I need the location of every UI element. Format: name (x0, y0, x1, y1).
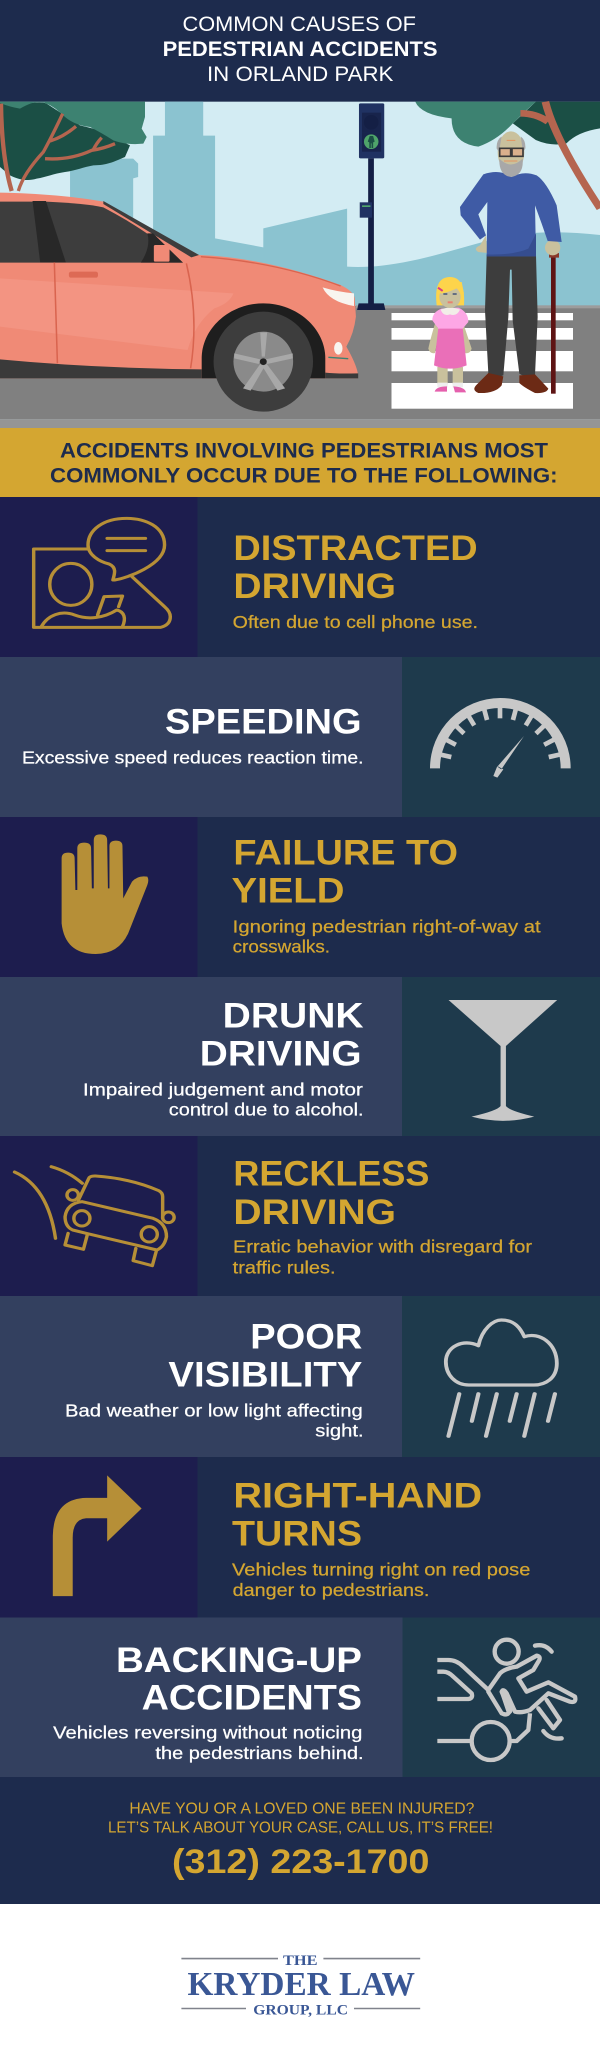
heading (116, 1641, 362, 1718)
heading: BACKING-UP (116, 1641, 362, 1680)
salmon car (0, 193, 358, 412)
heading: POOR (250, 1317, 362, 1356)
description (233, 1237, 532, 1277)
road (0, 305, 600, 428)
city buildings (70, 102, 600, 310)
heading: ACCIDENTS (142, 1679, 362, 1718)
panel: right-hand turns (0, 1457, 600, 1618)
icon: rain cloud (446, 1320, 557, 1436)
gold banner (0, 428, 600, 498)
heading: FAILURE TO (233, 833, 458, 872)
heading: RECKLESS (233, 1155, 429, 1194)
description: Impaired judgement and motor (83, 1079, 363, 1099)
heading (232, 1477, 482, 1554)
banner line 2: COMMONLY OCCUR DUE TO THE FOLLOWING: (50, 464, 558, 488)
traffic light (357, 103, 385, 310)
description (232, 1560, 530, 1600)
old man (460, 131, 562, 394)
icon: martini glass (449, 1000, 557, 1121)
description (53, 1722, 364, 1763)
heading: DRIVING (200, 1035, 362, 1074)
heading (200, 997, 364, 1074)
heading (233, 1155, 429, 1232)
panel: reckless driving (0, 1136, 600, 1296)
header panel (0, 0, 600, 102)
logo: The Kryder Law Group (181, 1953, 420, 2019)
icon: phone chat (34, 518, 170, 627)
heading (168, 1317, 362, 1395)
panel: drunk driving (0, 977, 600, 1136)
description: traffic rules. (233, 1257, 336, 1277)
heading: RIGHT-HAND (233, 1477, 482, 1516)
call to action line 1: HAVE YOU OR A LOVED ONE BEEN INJURED? (129, 1801, 475, 1818)
icon: right turn arrow (53, 1475, 142, 1596)
description: danger to pedestrians. (233, 1580, 429, 1600)
heading: YIELD (232, 872, 344, 911)
crosswalk (392, 313, 573, 409)
description: Often due to cell phone use. (233, 612, 478, 632)
icon: raised hand (62, 834, 148, 954)
panel: distracted driving (0, 497, 600, 657)
phone number: (312) 223-1700 (172, 1843, 429, 1881)
panel: backing-up accidents (0, 1618, 600, 1777)
panel: poor visibility (0, 1296, 600, 1457)
car wheel (214, 312, 313, 412)
heading (233, 529, 478, 606)
title line 1: COMMON CAUSES OF (182, 13, 416, 36)
heading: SPEEDING (165, 702, 362, 741)
heading: DRIVING (233, 1193, 396, 1232)
description: Bad weather or low light affecting (65, 1400, 363, 1420)
right tree (415, 102, 600, 208)
heading: TURNS (232, 1514, 362, 1554)
description: Vehicles reversing without noticing (53, 1722, 362, 1742)
panel: failure to yield (0, 817, 600, 977)
scene backdrop (0, 102, 600, 428)
description: the pedestrians behind. (155, 1743, 364, 1763)
description: Vehicles turning right on red pose (232, 1560, 530, 1580)
description: Excessive speed reduces reaction time. (22, 747, 364, 767)
call to action line 2: LET’S TALK ABOUT YOUR CASE, CALL US, IT’S FREE! (108, 1820, 493, 1837)
icon: swerving car (15, 1167, 174, 1266)
left tree (0, 102, 147, 191)
logo: The Kryder Law Group: GROUP, LLC (253, 2003, 348, 2019)
heading: DRIVING (233, 567, 396, 606)
panel: speeding (0, 657, 600, 817)
girl (428, 277, 472, 392)
title line 3: IN ORLAND PARK (207, 63, 393, 86)
icon: pedestrian struck by car (437, 1640, 575, 1760)
heading: DRUNK (223, 997, 364, 1036)
description: Ignoring pedestrian right-of-way at (233, 916, 541, 936)
footer call to action (0, 1777, 600, 1904)
description (233, 916, 541, 956)
logo: The Kryder Law Group: KRYDER LAW (188, 1966, 415, 2003)
description (65, 1400, 364, 1440)
title line 2: PEDESTRIAN ACCIDENTS (163, 38, 438, 61)
logo: The Kryder Law Group: THE (283, 1953, 318, 1969)
icon: speedometer (430, 698, 571, 778)
description: sight. (315, 1420, 364, 1440)
description (83, 1079, 364, 1119)
heading: DISTRACTED (233, 529, 478, 568)
description: crosswalks. (233, 936, 330, 956)
banner line 1: ACCIDENTS INVOLVING PEDESTRIANS MOST (60, 440, 548, 462)
description: control due to alcohol. (169, 1099, 364, 1119)
description: Erratic behavior with disregard for (233, 1237, 532, 1257)
heading: VISIBILITY (168, 1356, 362, 1395)
heading (232, 833, 458, 911)
illustration: street scene (0, 102, 600, 428)
